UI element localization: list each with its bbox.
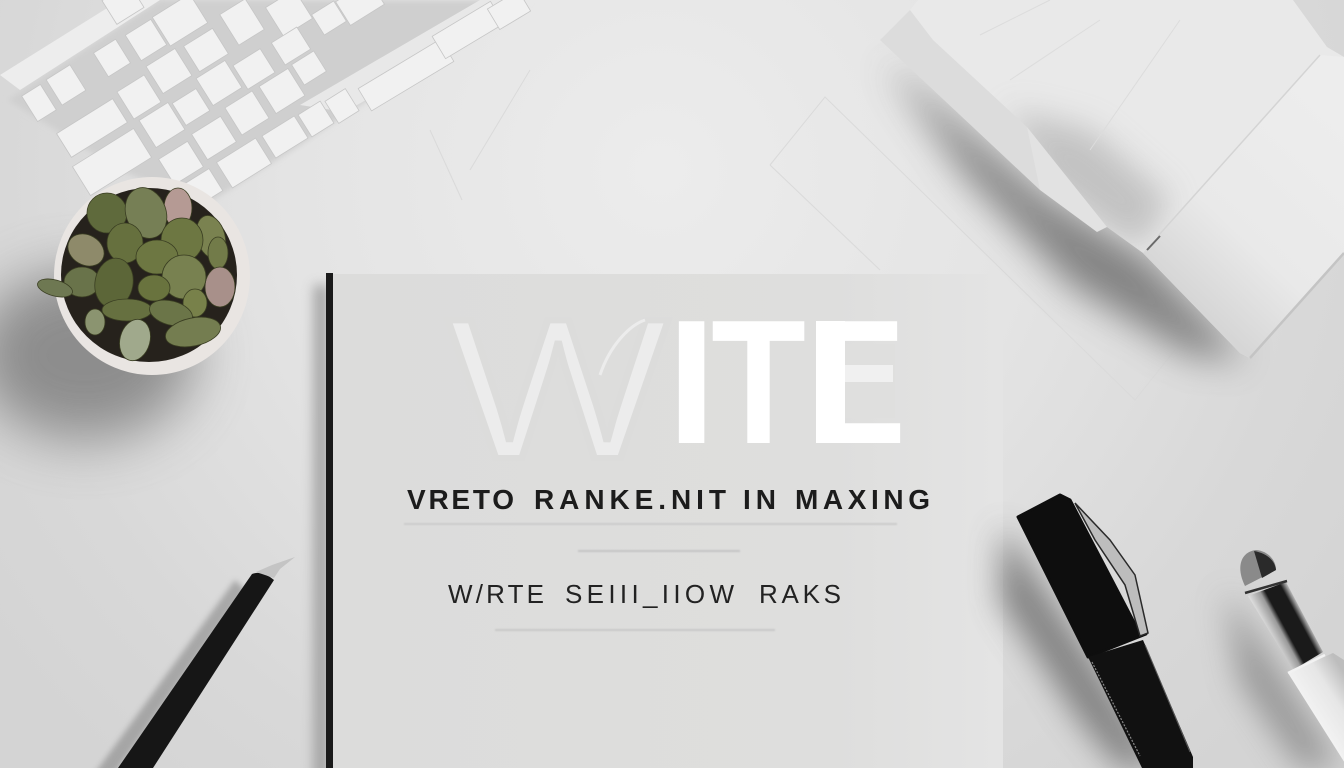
subtitle: VRETO RANKENIT IN MAXING: RANKE.NIT [534, 484, 726, 515]
title: WITE: E [806, 283, 906, 481]
subtitle: VRETO RANKENIT IN MAXING: MAXING [795, 484, 930, 515]
icon: succulent in white pot [36, 177, 250, 375]
shadow: book spine [314, 285, 328, 768]
icon: black marker [1018, 495, 1193, 768]
subtitle: VRETO RANKENIT IN MAXING: VRETO [407, 484, 514, 515]
icon: keyboard [0, 0, 540, 205]
shadow: notepad [885, 60, 1245, 360]
title: WITE: T [711, 283, 806, 481]
subtitle: VRETO RANKENIT IN MAXING: IN [743, 484, 776, 515]
panel: book cover [326, 273, 1003, 768]
shadow: plant pot [0, 270, 195, 440]
icon: black pencil [118, 557, 295, 768]
title: WITE: I [667, 283, 716, 481]
shadow: pencil [90, 580, 245, 768]
shadow: pen [1225, 590, 1340, 768]
tagline: W/RTE SEIII_IIOW RAKS: W/RTE [448, 579, 544, 609]
title: WITE [447, 278, 906, 501]
icon: folded notepad [880, 0, 1344, 358]
tagline: W/RTE SEIII_IIOW RAKS: SEIII_IIOW [565, 579, 734, 609]
subtitle: VRETO RANKENIT IN MAXING [407, 484, 930, 515]
tagline: W/RTE SEIII_IIOW RAKS [448, 579, 841, 609]
tagline: W/RTE SEIII_IIOW RAKS: RAKS [759, 579, 841, 609]
icon: white pen with chrome cap [1240, 550, 1344, 768]
faint desk markings [430, 70, 1175, 400]
shadow: marker [1000, 525, 1160, 768]
title: WITE: W [447, 278, 669, 501]
